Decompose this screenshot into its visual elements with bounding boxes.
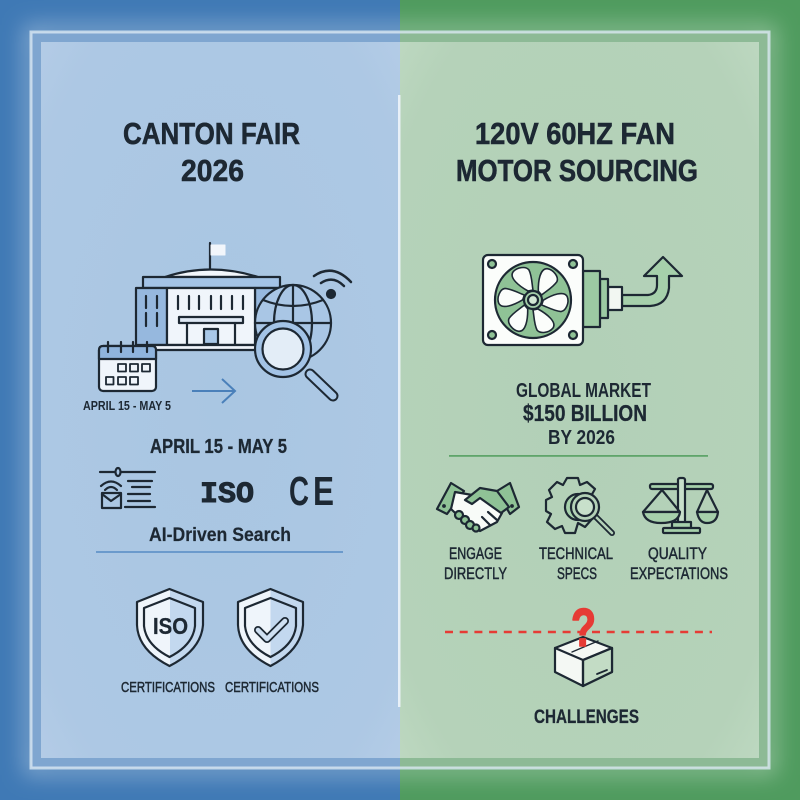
- label: engage directly: [444, 544, 507, 583]
- icon: package box: [555, 637, 612, 686]
- icon: secure document list: [100, 468, 155, 508]
- market size text: BY 2026: [548, 427, 615, 449]
- icon: handshake: [437, 483, 519, 532]
- icon: fan motor with arrow: [483, 255, 682, 345]
- centre divider line: [398, 95, 400, 707]
- title: 120V 60Hz fan motor sourcing: MOTOR SOURCING: [456, 153, 698, 188]
- title: Canton Fair 2026: 2026: [181, 153, 244, 188]
- title: 120V 60Hz fan motor sourcing: [456, 116, 698, 188]
- market size text: $150 BILLION: [523, 400, 647, 426]
- title: Canton Fair 2026: CANTON FAIR: [123, 116, 300, 151]
- arrow: [192, 379, 235, 403]
- CE mark: [289, 468, 334, 514]
- icon: calendar: [99, 342, 156, 391]
- panel: left blue background: [41, 42, 400, 758]
- date text: APRIL 15 - MAY 5: [150, 436, 287, 458]
- calendar caption: APRIL 15 - MAY 5: [83, 399, 171, 413]
- icon: globe with magnifier: [255, 285, 333, 396]
- certifications labels: CERTIFICATIONS: [121, 679, 215, 696]
- certifications labels: CERTIFICATIONS: [225, 679, 319, 696]
- challenges label: CHALLENGES: [534, 706, 639, 728]
- AI search label: AI-Driven Search: [149, 525, 291, 546]
- market size text: [516, 380, 651, 449]
- label: technical specs: TECHNICAL: [539, 544, 613, 563]
- icon: red question mark: ?: [571, 598, 596, 658]
- certifications labels: [121, 679, 319, 696]
- title: Canton Fair 2026: [123, 116, 300, 188]
- dashed red barrier line: [445, 631, 712, 633]
- ISO mark: ISO: [200, 478, 254, 512]
- label: technical specs: SPECS: [557, 564, 597, 583]
- label: quality expectations: [630, 544, 728, 583]
- icon: wifi signal: [314, 271, 351, 298]
- market size text: GLOBAL MARKET: [516, 380, 651, 402]
- icon: ISO shield: ISO: [153, 613, 188, 639]
- title: 120V 60Hz fan motor sourcing: 120V 60HZ FAN: [475, 116, 675, 151]
- label: engage directly: ENGAGE: [449, 544, 502, 563]
- CE mark: E: [313, 468, 334, 514]
- icon: ISO shield: [137, 589, 203, 666]
- icon: gear with magnifier: [546, 478, 612, 533]
- label: quality expectations: QUALITY: [648, 544, 707, 563]
- panel: fan motor content: [437, 116, 728, 728]
- icon: exhibition hall with flag: [136, 243, 280, 350]
- label: quality expectations: EXPECTATIONS: [630, 564, 728, 583]
- CE mark: C: [289, 468, 309, 514]
- section rule: [449, 455, 708, 457]
- icon: balance scales: [643, 478, 718, 533]
- label: technical specs: [539, 544, 613, 583]
- section rule: [96, 551, 343, 553]
- panel: Canton Fair content: [83, 116, 351, 696]
- label: engage directly: DIRECTLY: [444, 564, 507, 583]
- panel: right green background: [400, 42, 759, 758]
- icon: check shield: [238, 589, 303, 666]
